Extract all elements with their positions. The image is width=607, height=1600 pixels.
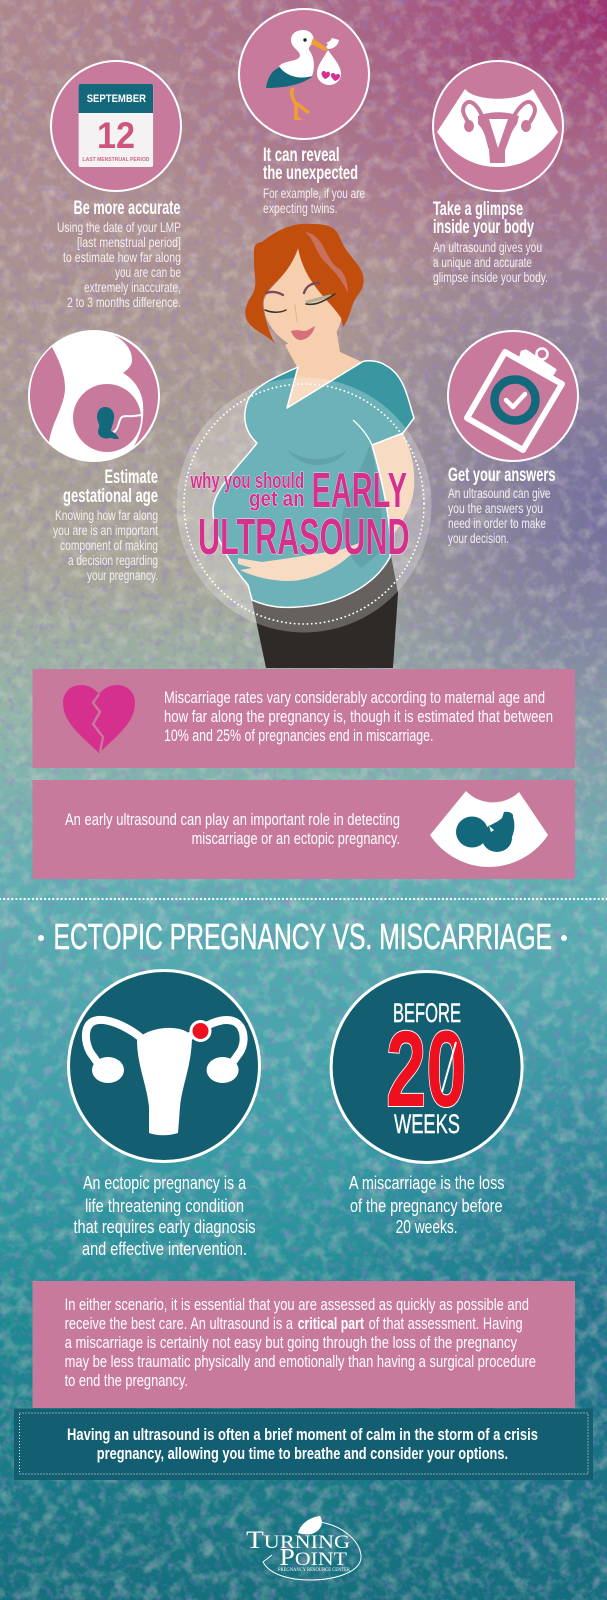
panel: take a glimpse <box>433 61 563 285</box>
text block <box>349 1173 504 1237</box>
heading: gestational age <box>63 486 158 507</box>
panel: it can reveal the unexpected <box>239 9 369 216</box>
logo: turning point: TURNING <box>246 1527 350 1554</box>
heading: Take a glimpse <box>433 199 523 220</box>
title: ULTRASOUND <box>198 508 410 565</box>
text block: need in order to make <box>448 515 546 531</box>
text block: An ectopic pregnancy is a <box>83 1173 247 1193</box>
text block: your decision. <box>448 530 509 546</box>
text block <box>57 219 181 310</box>
dotted divider <box>0 898 607 900</box>
icon: before 20 weeks: BEFORE <box>393 998 461 1028</box>
text block <box>433 239 548 285</box>
icon: calendar <box>51 61 181 191</box>
hand <box>238 542 362 581</box>
text block: extremely inaccurate, <box>84 279 181 295</box>
pants <box>250 550 398 668</box>
text block: An early ultrasound can play an important role in detecting <box>65 811 400 829</box>
logo: turning point <box>246 1516 361 1580</box>
panel: ectopic pregnancy <box>68 970 260 1259</box>
text block <box>74 1173 256 1259</box>
text block <box>65 1296 536 1390</box>
heading: Get your answers <box>448 465 556 486</box>
panel: in either scenario <box>32 1281 575 1408</box>
text block: life threatening condition <box>85 1196 244 1216</box>
text block: you the answers you <box>448 500 543 516</box>
text block: a decision regarding <box>68 552 158 568</box>
icon: before 20 weeks <box>331 972 522 1162</box>
callout: brief moment of calm <box>14 1408 593 1480</box>
text block <box>164 689 553 745</box>
title: get an <box>249 486 305 511</box>
title: why you should <box>190 468 304 493</box>
panel: get your answers <box>448 331 578 546</box>
logo: turning point: PREGNANCY RESOURCE CENTER <box>278 1568 351 1573</box>
text block: of that assessment. Having <box>369 1315 523 1333</box>
text block: receive the best care. An ultrasound is a <box>65 1315 294 1333</box>
text block: 10% and 25% of pregnancies end in miscarriage. <box>164 727 434 745</box>
shirt folds <box>342 445 382 568</box>
panel: miscarriage <box>331 972 522 1237</box>
shirt <box>213 361 414 607</box>
heading: It can reveal <box>263 145 340 166</box>
icon: ultrasound fetus <box>430 791 548 867</box>
icon: before 20 weeks: WEEKS <box>394 1109 460 1139</box>
text block: to estimate how far along <box>63 249 181 265</box>
text block: A miscarriage is the loss <box>349 1173 504 1193</box>
text block: [last menstrual period] <box>77 234 181 250</box>
icon: ultrasound of uterus <box>433 61 563 191</box>
icon: before 20 weeks: 20 <box>386 1008 466 1129</box>
text block: you are can be <box>115 264 181 280</box>
text block: 20 weeks. <box>396 1217 458 1237</box>
title: EARLY <box>312 464 407 518</box>
heading: Be more accurate <box>74 198 180 219</box>
text block: For example, if you are <box>263 185 365 201</box>
text block <box>67 1426 538 1463</box>
facial features <box>265 283 335 340</box>
heading: inside your body <box>433 217 534 238</box>
heading: the unexpected <box>263 163 358 184</box>
icon: stork <box>239 9 369 139</box>
text block: critical part <box>298 1315 364 1333</box>
text block: expecting twins. <box>263 200 338 216</box>
heading <box>433 199 534 238</box>
panel: early ultrasound role <box>32 780 575 879</box>
arm <box>360 433 414 552</box>
text block: that requires early diagnosis <box>74 1217 256 1237</box>
icon: calendar: 12 <box>97 115 135 156</box>
text block: Knowing how far along <box>55 507 158 523</box>
text block <box>263 185 365 216</box>
text block: 2 to 3 months difference. <box>67 294 181 310</box>
heading: Estimate <box>104 467 158 488</box>
icon: womb with fetus <box>29 331 159 461</box>
heading <box>63 467 158 507</box>
heading <box>263 145 358 184</box>
text block: a unique and accurate <box>433 254 532 270</box>
icon: clipboard <box>448 331 578 461</box>
panel: estimate gestational age <box>29 331 159 583</box>
text block: your pregnancy. <box>87 567 158 583</box>
hair <box>245 224 364 344</box>
icon: calendar: SEPTEMBER <box>87 93 146 105</box>
illustration: pregnant woman <box>213 224 414 668</box>
text block: An ultrasound gives you <box>433 239 542 255</box>
text block: and effective intervention. <box>82 1239 247 1259</box>
icon: broken heart <box>63 685 135 753</box>
text block <box>53 507 158 583</box>
text block: miscarriage or an ectopic pregnancy. <box>192 830 400 848</box>
text block: An ultrasound can give <box>448 485 551 501</box>
icon: uterus with red dot <box>68 970 260 1162</box>
logo: turning point: POINT <box>280 1545 347 1571</box>
text block: of the pregnancy before <box>350 1196 502 1216</box>
text block: component of making <box>60 537 158 553</box>
panel: miscarriage rates <box>32 669 575 768</box>
text block: Using the date of your LMP <box>57 219 181 235</box>
title <box>190 464 410 565</box>
text block <box>448 485 551 546</box>
text block: glimpse inside your body. <box>433 269 548 285</box>
neck and face <box>285 322 362 408</box>
panel: be more accurate <box>51 61 181 310</box>
text block: to end the pregnancy. <box>65 1372 188 1390</box>
icon: calendar: LAST MENSTRUAL PERIOD <box>82 157 150 163</box>
text block <box>65 811 400 848</box>
decorative circle behind title <box>176 378 432 632</box>
text block: you are is an important <box>53 522 158 538</box>
